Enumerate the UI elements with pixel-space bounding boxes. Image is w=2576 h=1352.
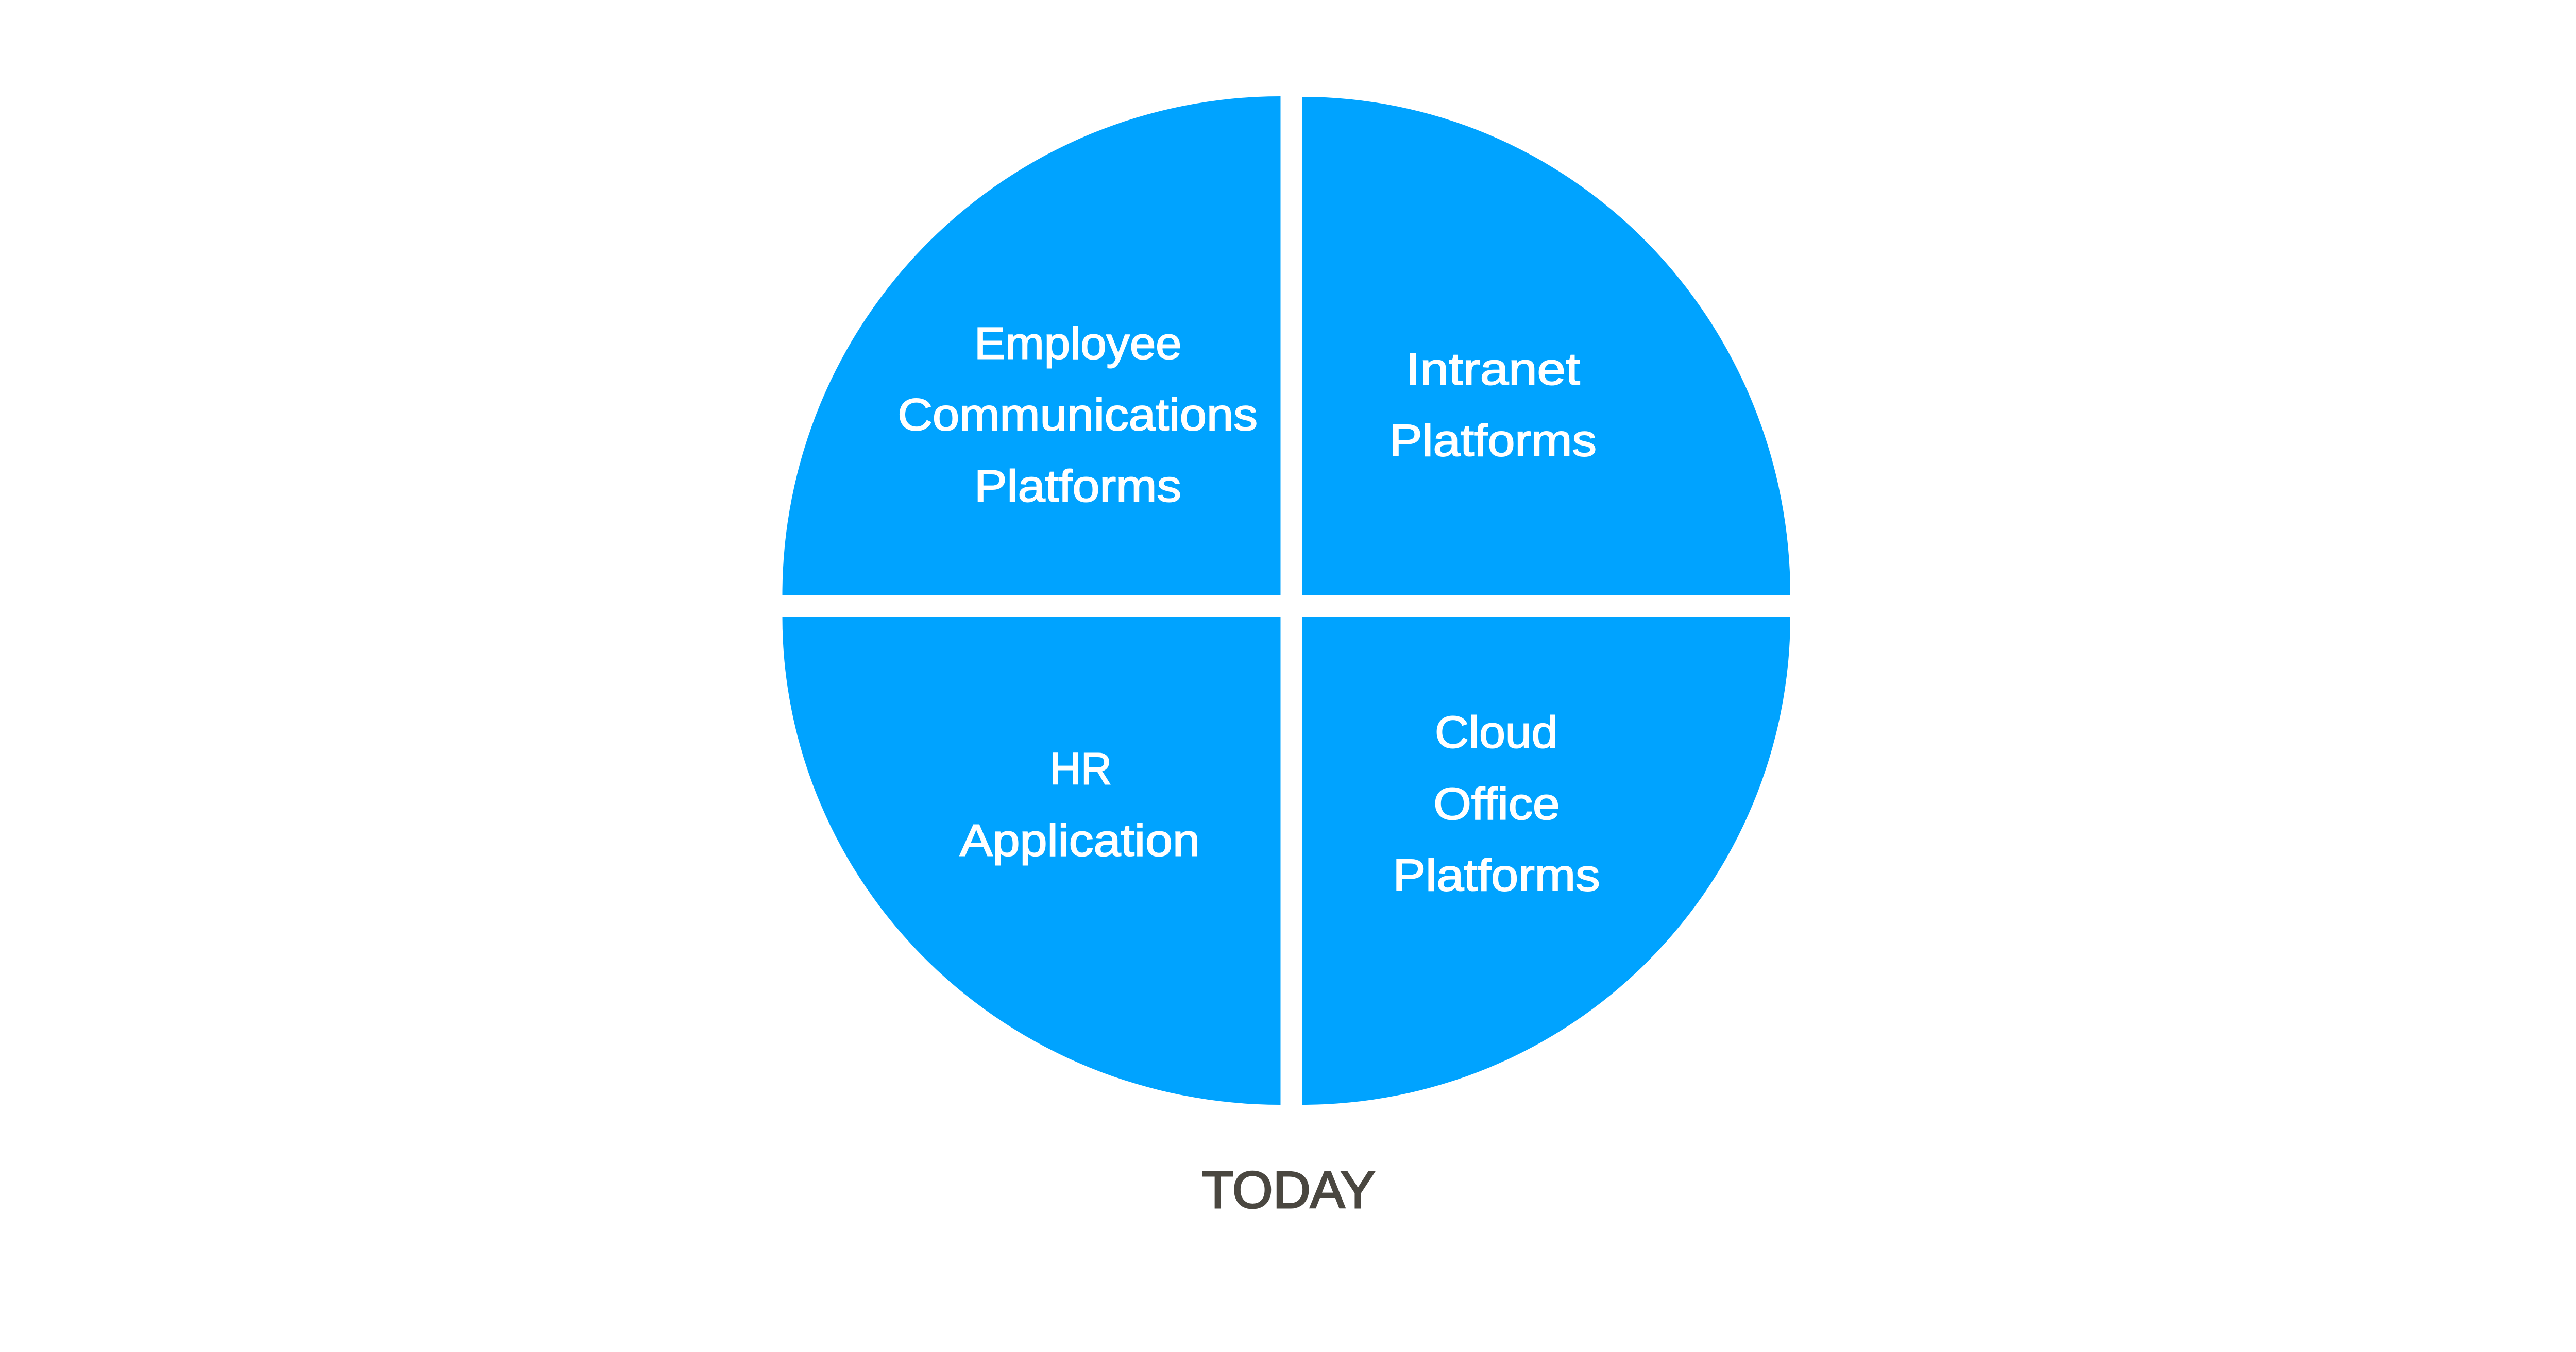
label: intranet platforms: Intranet bbox=[1406, 344, 1580, 395]
label: HR application bbox=[960, 744, 1200, 866]
caption: today: TODAY bbox=[1202, 1161, 1375, 1219]
label: employee communications platforms: Communications bbox=[897, 389, 1258, 440]
label: HR application: Application bbox=[960, 815, 1200, 866]
panel: cloud office quadrant bbox=[1302, 617, 1790, 1105]
label: cloud office platforms: Office bbox=[1433, 779, 1560, 829]
label: HR application: HR bbox=[1050, 744, 1112, 794]
label: intranet platforms bbox=[1389, 344, 1597, 466]
label: employee communications platforms: Employee bbox=[974, 318, 1182, 369]
label: cloud office platforms: Cloud bbox=[1435, 707, 1557, 758]
label: intranet platforms: Platforms bbox=[1389, 415, 1597, 466]
label: cloud office platforms: Platforms bbox=[1393, 850, 1600, 900]
panel: HR application quadrant bbox=[782, 617, 1281, 1105]
label: cloud office platforms bbox=[1393, 707, 1600, 900]
panel: employee communications quadrant bbox=[782, 96, 1281, 595]
panel: intranet quadrant bbox=[1302, 97, 1790, 595]
label: employee communications platforms bbox=[897, 318, 1258, 511]
label: employee communications platforms: Platforms bbox=[974, 461, 1181, 511]
